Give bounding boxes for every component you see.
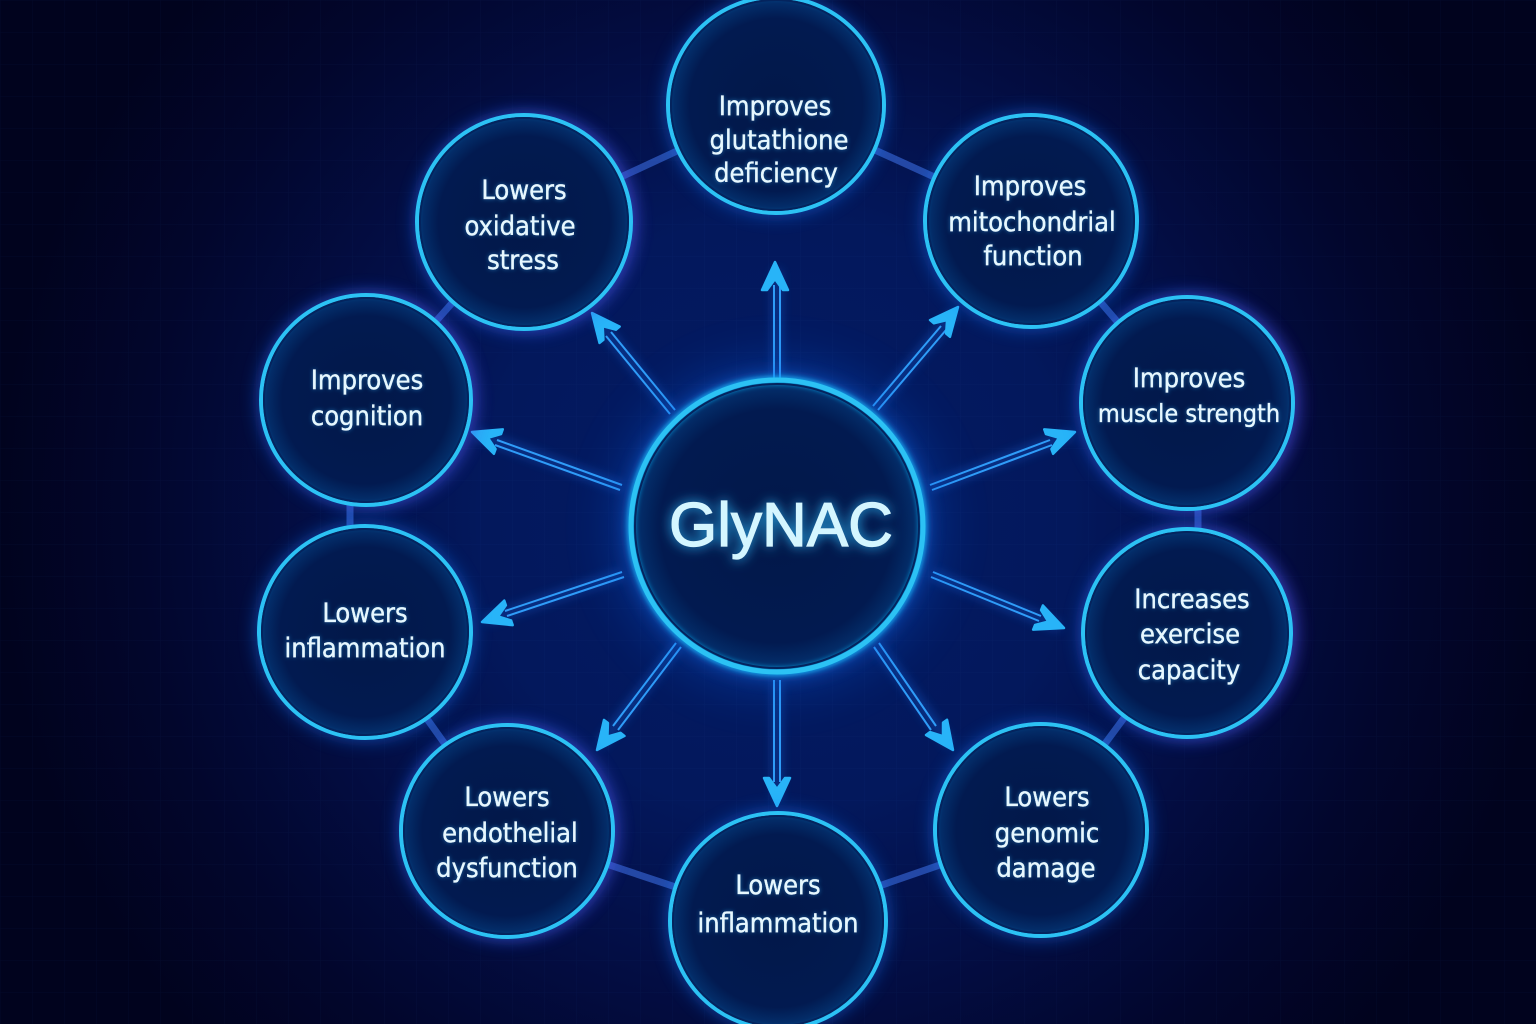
node: lowers genomic damage: Lowers — [1004, 782, 1090, 813]
node: lowers endothelial dysfunction: dysfunction — [436, 853, 578, 884]
node: lowers inflammation bottom: Lowers — [735, 870, 821, 901]
node: lowers oxidative stress: Lowers — [481, 175, 567, 206]
arrow: to mitochondrial — [873, 299, 968, 410]
node: increases exercise capacity — [1081, 527, 1297, 739]
node: improves muscle strength — [1079, 295, 1299, 511]
centre node: GlyNAC: GlyNAC — [669, 491, 893, 560]
node: lowers genomic damage: genomic — [995, 818, 1099, 849]
arrow: to glutathione — [762, 262, 788, 378]
node: improves glutathione deficiency — [666, 0, 886, 215]
node: improves mitochondrial function — [923, 113, 1139, 329]
arrow: to cognition — [468, 420, 622, 490]
node: improves cognition — [259, 293, 476, 507]
node: improves glutathione deficiency: glutathione — [710, 125, 848, 156]
node: lowers endothelial dysfunction: endothelial — [442, 818, 578, 849]
arrow: to genomic damage — [874, 643, 964, 758]
arrow: to oxidative stress — [582, 305, 675, 414]
node: lowers endothelial dysfunction — [399, 723, 617, 939]
node: improves glutathione deficiency: deficiency — [714, 158, 838, 189]
node: lowers oxidative stress — [415, 113, 636, 331]
node: improves muscle strength: Improves — [1133, 363, 1245, 394]
arrow: to muscle strength — [930, 420, 1079, 490]
node: increases exercise capacity: capacity — [1138, 655, 1240, 686]
arrows from centre to outer circles — [468, 262, 1079, 806]
node: improves mitochondrial function: Improves — [974, 171, 1086, 202]
node: increases exercise capacity: exercise — [1140, 619, 1240, 650]
node: lowers genomic damage: damage — [996, 853, 1096, 884]
node: lowers inflammation left: inflammation — [284, 633, 446, 664]
node: improves mitochondrial function: function — [983, 241, 1083, 272]
centre node: GlyNAC — [612, 361, 942, 691]
arrow: to inflammation bottom — [764, 680, 790, 806]
arrow: to exercise capacity — [931, 572, 1069, 640]
node: improves mitochondrial function: mitochondrial — [948, 207, 1116, 238]
node: improves cognition: cognition — [311, 401, 423, 432]
node: lowers inflammation left — [257, 524, 473, 740]
node: increases exercise capacity: Increases — [1134, 584, 1250, 615]
arrow: to endothelial — [587, 643, 681, 758]
node: lowers inflammation bottom — [668, 811, 888, 1024]
node: lowers oxidative stress: stress — [487, 245, 559, 276]
node: improves muscle strength: muscle strength — [1098, 399, 1280, 428]
node: lowers endothelial dysfunction: Lowers — [464, 782, 550, 813]
node: lowers inflammation bottom: inflammation — [697, 908, 859, 939]
node: improves cognition: Improves — [311, 365, 423, 396]
arrow: to inflammation left — [478, 572, 624, 634]
connector ring between outer circles — [350, 105, 1198, 921]
node: lowers inflammation left: Lowers — [322, 598, 408, 629]
node: lowers genomic damage — [933, 722, 1149, 938]
node: improves glutathione deficiency: Improves — [719, 91, 831, 122]
node: lowers oxidative stress: oxidative — [464, 211, 576, 242]
